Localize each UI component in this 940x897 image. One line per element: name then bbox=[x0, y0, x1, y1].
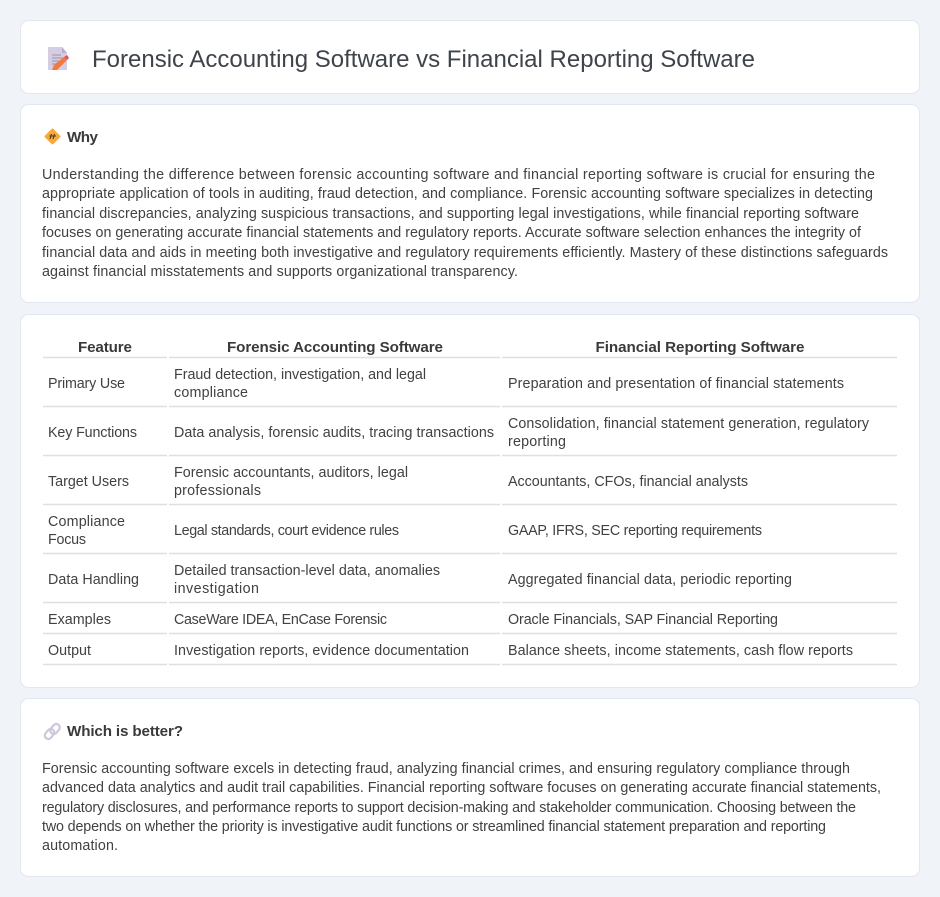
row: key functions: Consolidation, financial statement generation, regulatory bbox=[508, 416, 870, 432]
row: examples bbox=[48, 612, 778, 628]
row: key functions: Key Functions bbox=[48, 425, 137, 441]
row: data handling bbox=[48, 563, 792, 597]
row: compliance focus: Legal standards, court evidence rules bbox=[174, 523, 399, 539]
table header: Financial Reporting Software bbox=[596, 339, 804, 356]
which is better paragraph bbox=[42, 761, 881, 854]
row: data handling: investigation bbox=[174, 581, 259, 597]
row: examples: Examples bbox=[48, 612, 111, 628]
row: primary use: compliance bbox=[174, 385, 248, 401]
row: primary use: Preparation and presentation of financial statements bbox=[508, 376, 844, 392]
panel: which is better bbox=[20, 698, 920, 876]
why paragraph: Understanding the difference between forensic accounting software and financial reporting software is crucial for ensuring the bbox=[42, 167, 875, 183]
row: key functions bbox=[48, 416, 870, 450]
table header: Feature bbox=[78, 339, 132, 356]
row: compliance focus bbox=[48, 514, 762, 548]
panel: why bbox=[20, 104, 920, 302]
which is better paragraph: two depends on whether the priority is investigative audit functions or streamlined financial statement preparation and reporting bbox=[42, 819, 826, 835]
row: data handling: Detailed transaction-level data, anomalies bbox=[174, 563, 440, 579]
row: compliance focus: GAAP, IFRS, SEC reporting requirements bbox=[508, 523, 762, 539]
which is better paragraph: regulatory disclosures, and performance reports to support decision-making and stakeholder communication. Choosing between the bbox=[42, 800, 856, 816]
why paragraph: financial discrepancies, analyzing suspicious transactions, and supporting legal investigations, while financial reporting software bbox=[42, 206, 859, 222]
icon: document with pencil bbox=[48, 47, 69, 70]
row: target users bbox=[48, 465, 748, 499]
row: primary use bbox=[48, 367, 844, 401]
panel: comparison table bbox=[20, 314, 920, 688]
table header bbox=[78, 339, 804, 356]
row: examples: CaseWare IDEA, EnCase Forensic bbox=[174, 612, 387, 628]
heading: which is better: Which is better? bbox=[67, 723, 183, 740]
why paragraph bbox=[42, 167, 888, 280]
row: key functions: Data analysis, forensic audits, tracing transactions bbox=[174, 425, 494, 441]
panel: title card bbox=[20, 20, 920, 94]
row: output bbox=[48, 643, 853, 659]
which is better paragraph: automation. bbox=[42, 838, 118, 854]
icon: link bbox=[43, 723, 61, 740]
row: target users: Accountants, CFOs, financial analysts bbox=[508, 474, 748, 490]
row: output: Balance sheets, income statements, cash flow reports bbox=[508, 643, 853, 659]
why paragraph: appropriate application of tools in auditing, fraud detection, and compliance. Forensic accounting software specializes in detecting bbox=[42, 186, 873, 202]
table header: Forensic Accounting Software bbox=[227, 339, 443, 356]
why paragraph: financial data and aids in meeting both investigative and regulatory requirements efficiently. Mastery of these distinctions safeguards bbox=[42, 245, 888, 261]
row: compliance focus: Focus bbox=[48, 532, 86, 548]
row: compliance focus: Compliance bbox=[48, 514, 125, 530]
why paragraph: against financial misstatements and supports organizational transparency. bbox=[42, 264, 518, 280]
row: output: Investigation reports, evidence documentation bbox=[174, 643, 469, 659]
row: data handling: Aggregated financial data, periodic reporting bbox=[508, 572, 792, 588]
which is better paragraph: Forensic accounting software excels in detecting fraud, analyzing financial crimes, and ensuring regulatory compliance through bbox=[42, 761, 850, 777]
row: key functions: reporting bbox=[508, 434, 566, 450]
why paragraph: focuses on generating accurate financial statements and regulatory reports. Accurate software selection enhances the integrity of bbox=[42, 225, 861, 241]
row: data handling: Data Handling bbox=[48, 572, 139, 588]
row: primary use: Primary Use bbox=[48, 376, 125, 392]
row: target users: Forensic accountants, auditors, legal bbox=[174, 465, 408, 481]
row: examples: Oracle Financials, SAP Financial Reporting bbox=[508, 612, 778, 628]
row: target users: Target Users bbox=[48, 474, 129, 490]
row: output: Output bbox=[48, 643, 91, 659]
row: target users: professionals bbox=[174, 483, 261, 499]
heading: why: Why bbox=[67, 129, 99, 146]
row: primary use: Fraud detection, investigation, and legal bbox=[174, 367, 426, 383]
icon: construction diamond bbox=[44, 128, 61, 145]
which is better paragraph: advanced data analytics and audit trail capabilities. Financial reporting software focuses on generating accurate financial statements, bbox=[42, 780, 881, 796]
title: Forensic Accounting Software vs Financial Reporting Software bbox=[92, 46, 755, 73]
